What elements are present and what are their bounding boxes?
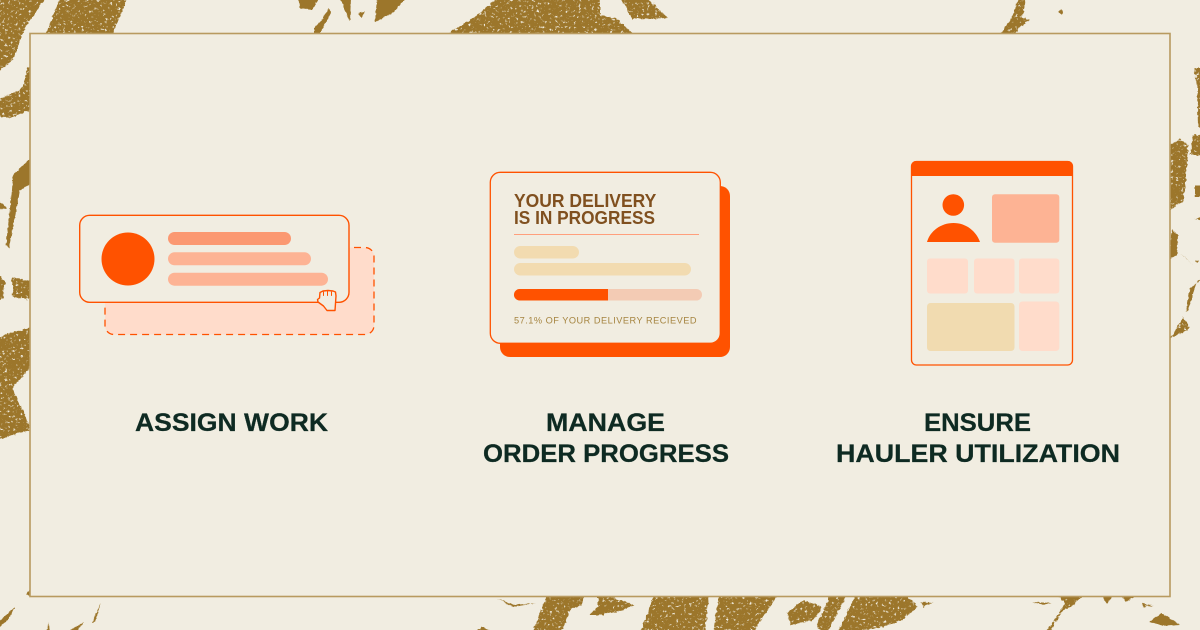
- tan wide tile: [927, 303, 1014, 351]
- small tiles: [927, 258, 1059, 294]
- heading: ensure hauler utilization: ENSURE: [924, 409, 1031, 437]
- progress caption: 57.1% OF YOUR DELIVERY RECIEVED: [514, 316, 697, 326]
- avatar circle: [102, 232, 154, 286]
- panel: ensure hauler utilization: [836, 161, 1120, 468]
- image tile: [992, 194, 1059, 243]
- text line bars: [168, 232, 328, 286]
- card title: YOUR DELIVERY: [514, 191, 656, 211]
- icon: user silhouette: [927, 194, 980, 242]
- heading: ensure hauler utilization: HAULER UTILIZATION: [836, 440, 1120, 468]
- placeholder bars: [514, 246, 691, 276]
- window header: [911, 161, 1073, 176]
- tall tile: [1019, 302, 1059, 351]
- dashed drop target card: [105, 248, 374, 334]
- card title: IS IN PROGRESS: [514, 208, 655, 228]
- panel: assign work: [80, 215, 374, 437]
- card divider: [514, 234, 699, 235]
- heading: manage order progress: ORDER PROGRESS: [483, 440, 729, 468]
- heading: assign work: ASSIGN WORK: [135, 409, 328, 437]
- dragged work card: [80, 215, 349, 302]
- heading: manage order progress: MANAGE: [546, 409, 665, 437]
- card shadow: [500, 186, 730, 357]
- progress bar: [514, 289, 702, 300]
- panel: manage order progress: [483, 172, 730, 468]
- dashboard window: [911, 161, 1073, 365]
- icon: grabbing hand cursor: [318, 290, 336, 310]
- delivery card: [490, 172, 720, 343]
